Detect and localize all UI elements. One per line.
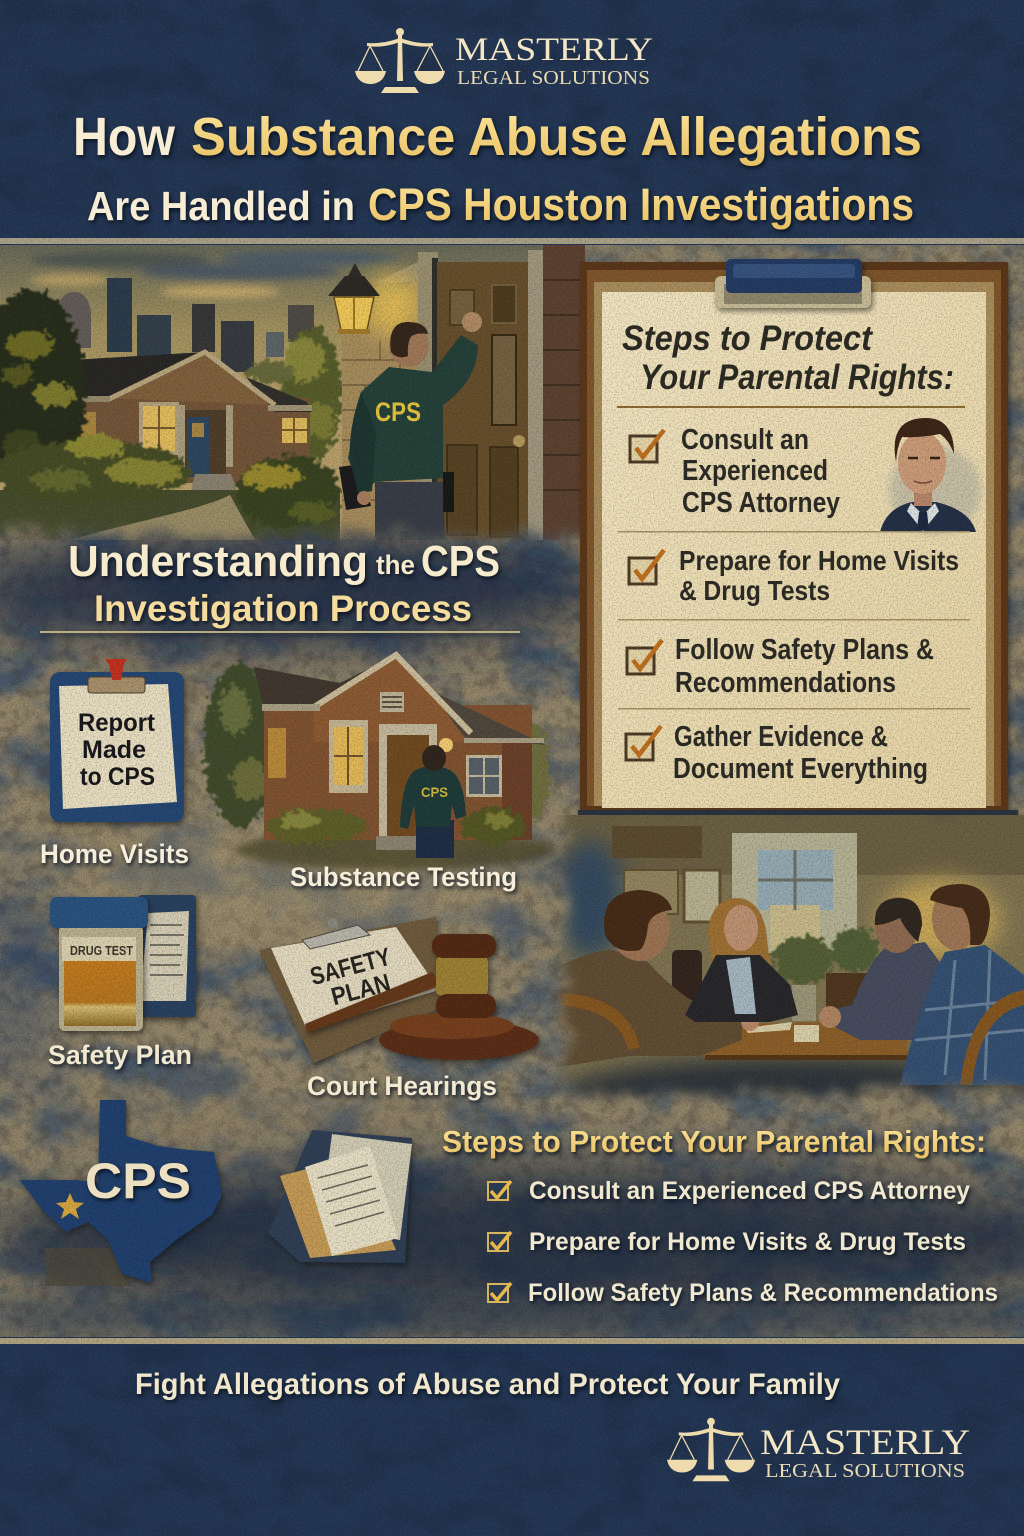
- tree right of house: [246, 327, 342, 463]
- panel heading: [622, 319, 954, 397]
- panel: clipboard with steps to protect your parental rights: [578, 259, 1018, 824]
- list item 1: Consult an Experienced CPS Attorney: [529, 1177, 970, 1205]
- title: [73, 107, 922, 230]
- illustration: CPS worker arriving at a brick house: CPS: [421, 784, 448, 800]
- gavel: [305, 934, 539, 1060]
- map: Texas with star: [20, 1100, 222, 1286]
- clouds: [30, 251, 400, 298]
- agent: [339, 312, 482, 540]
- panel heading: Your Parental Rights:: [640, 358, 954, 397]
- icon: safety plan clipboard and judge's gavel: PLAN: [328, 969, 393, 1011]
- icon: safety plan clipboard and judge's gavel: SAFETY: [307, 943, 394, 991]
- clipboard frame: [578, 262, 1018, 824]
- top logo: Masterly Legal Solutions: LEGAL SOLUTIONS: [457, 67, 650, 89]
- title: CPS Houston Investigations: [368, 179, 914, 230]
- label: Court Hearings: Court Hearings: [307, 1071, 497, 1101]
- top logo: Masterly Legal Solutions: [355, 28, 653, 93]
- icon: report made to CPS clipboard: Made: [82, 736, 146, 764]
- man left: [558, 950, 742, 1066]
- man in sweater: [834, 942, 940, 1040]
- illustration: CPS worker arriving at a brick house: [204, 655, 555, 870]
- list item 2: Prepare for Home Visits & Drug Tests: [529, 1228, 966, 1256]
- footer logo: Masterly Legal Solutions: [667, 1418, 970, 1482]
- step 3: [627, 634, 934, 699]
- icon: report made to CPS clipboard: to CPS: [80, 763, 155, 791]
- map label: CPS: CPS: [85, 1153, 191, 1209]
- icon: drug test specimen jar with lab paperwork: DRUG TEST: [70, 943, 133, 958]
- icon: drug test specimen jar with lab paperwork: [50, 895, 196, 1031]
- title: Are Handled in: [87, 183, 355, 229]
- step 2: Prepare for Home Visits: [679, 545, 959, 576]
- label: Safety Plan: Safety Plan: [48, 1040, 192, 1070]
- footer logo: Masterly Legal Solutions: MASTERLY: [760, 1422, 970, 1462]
- step 1 with attorney portrait: Consult an: [681, 424, 809, 456]
- metal clip: [715, 259, 871, 308]
- illustration: CPS agent knocking at the door of a Houston home: [0, 245, 585, 540]
- top logo: Masterly Legal Solutions: MASTERLY: [455, 32, 653, 68]
- lantern: [328, 263, 380, 334]
- footer tagline: Fight Allegations of Abuse and Protect Your Family: [135, 1368, 840, 1401]
- woman attorney: [708, 898, 770, 965]
- step 3: Recommendations: [675, 667, 896, 699]
- left tree: [0, 290, 86, 500]
- label: Substance Testing: Substance Testing: [290, 862, 517, 892]
- heading: Understanding the CPS Investigation Process: the: [376, 550, 415, 580]
- man in plaid: [900, 945, 1024, 1085]
- agent: CPS: [375, 397, 421, 427]
- heading: Understanding the CPS Investigation Process: [40, 537, 520, 633]
- title: How: [73, 107, 176, 167]
- panel heading: Steps to Protect: [622, 319, 873, 358]
- table: [700, 1020, 907, 1060]
- paper sheet: [602, 292, 986, 808]
- illustration: parents meeting with attorney in an office: [556, 815, 1024, 1110]
- heading: Understanding the CPS Investigation Process: Understanding: [68, 537, 368, 586]
- step 2: & Drug Tests: [679, 575, 830, 606]
- icon: stack of case documents: [268, 1130, 412, 1263]
- heading: Understanding the CPS Investigation Process: CPS: [421, 537, 500, 586]
- footer logo: Masterly Legal Solutions: LEGAL SOLUTIONS: [765, 1460, 965, 1482]
- step 4: [626, 721, 928, 785]
- list: steps to protect your parental rights: [442, 1124, 998, 1307]
- wall, door frame and brick: [342, 245, 585, 540]
- icon: report made to CPS clipboard: Report: [78, 709, 156, 737]
- title: Substance Abuse Allegations: [191, 107, 922, 167]
- attorney portrait: [880, 418, 981, 534]
- step 4: Document Everything: [673, 753, 928, 785]
- step 1 with attorney portrait: Experienced: [682, 455, 828, 487]
- icon: report made to CPS clipboard: [50, 659, 184, 822]
- step 1 with attorney portrait: [630, 418, 981, 534]
- icon: safety plan clipboard and judge's gavel: [259, 917, 539, 1063]
- house: [62, 352, 312, 491]
- list: steps to protect your parental rights: Steps to Protect Your Parental Rights:: [442, 1124, 986, 1159]
- label: Home Visits: Home Visits: [40, 839, 189, 869]
- shadow below table: [564, 1044, 1024, 1110]
- garden and bushes: [0, 435, 340, 540]
- step 4: Gather Evidence &: [674, 721, 888, 753]
- list item 3: Follow Safety Plans & Recommendations: [528, 1279, 998, 1307]
- step 1 with attorney portrait: CPS Attorney: [682, 487, 840, 519]
- step 2: [629, 545, 959, 606]
- step 3: Follow Safety Plans &: [675, 634, 934, 666]
- heading: Understanding the CPS Investigation Process: Investigation Process: [94, 588, 472, 629]
- skyline: [57, 278, 314, 372]
